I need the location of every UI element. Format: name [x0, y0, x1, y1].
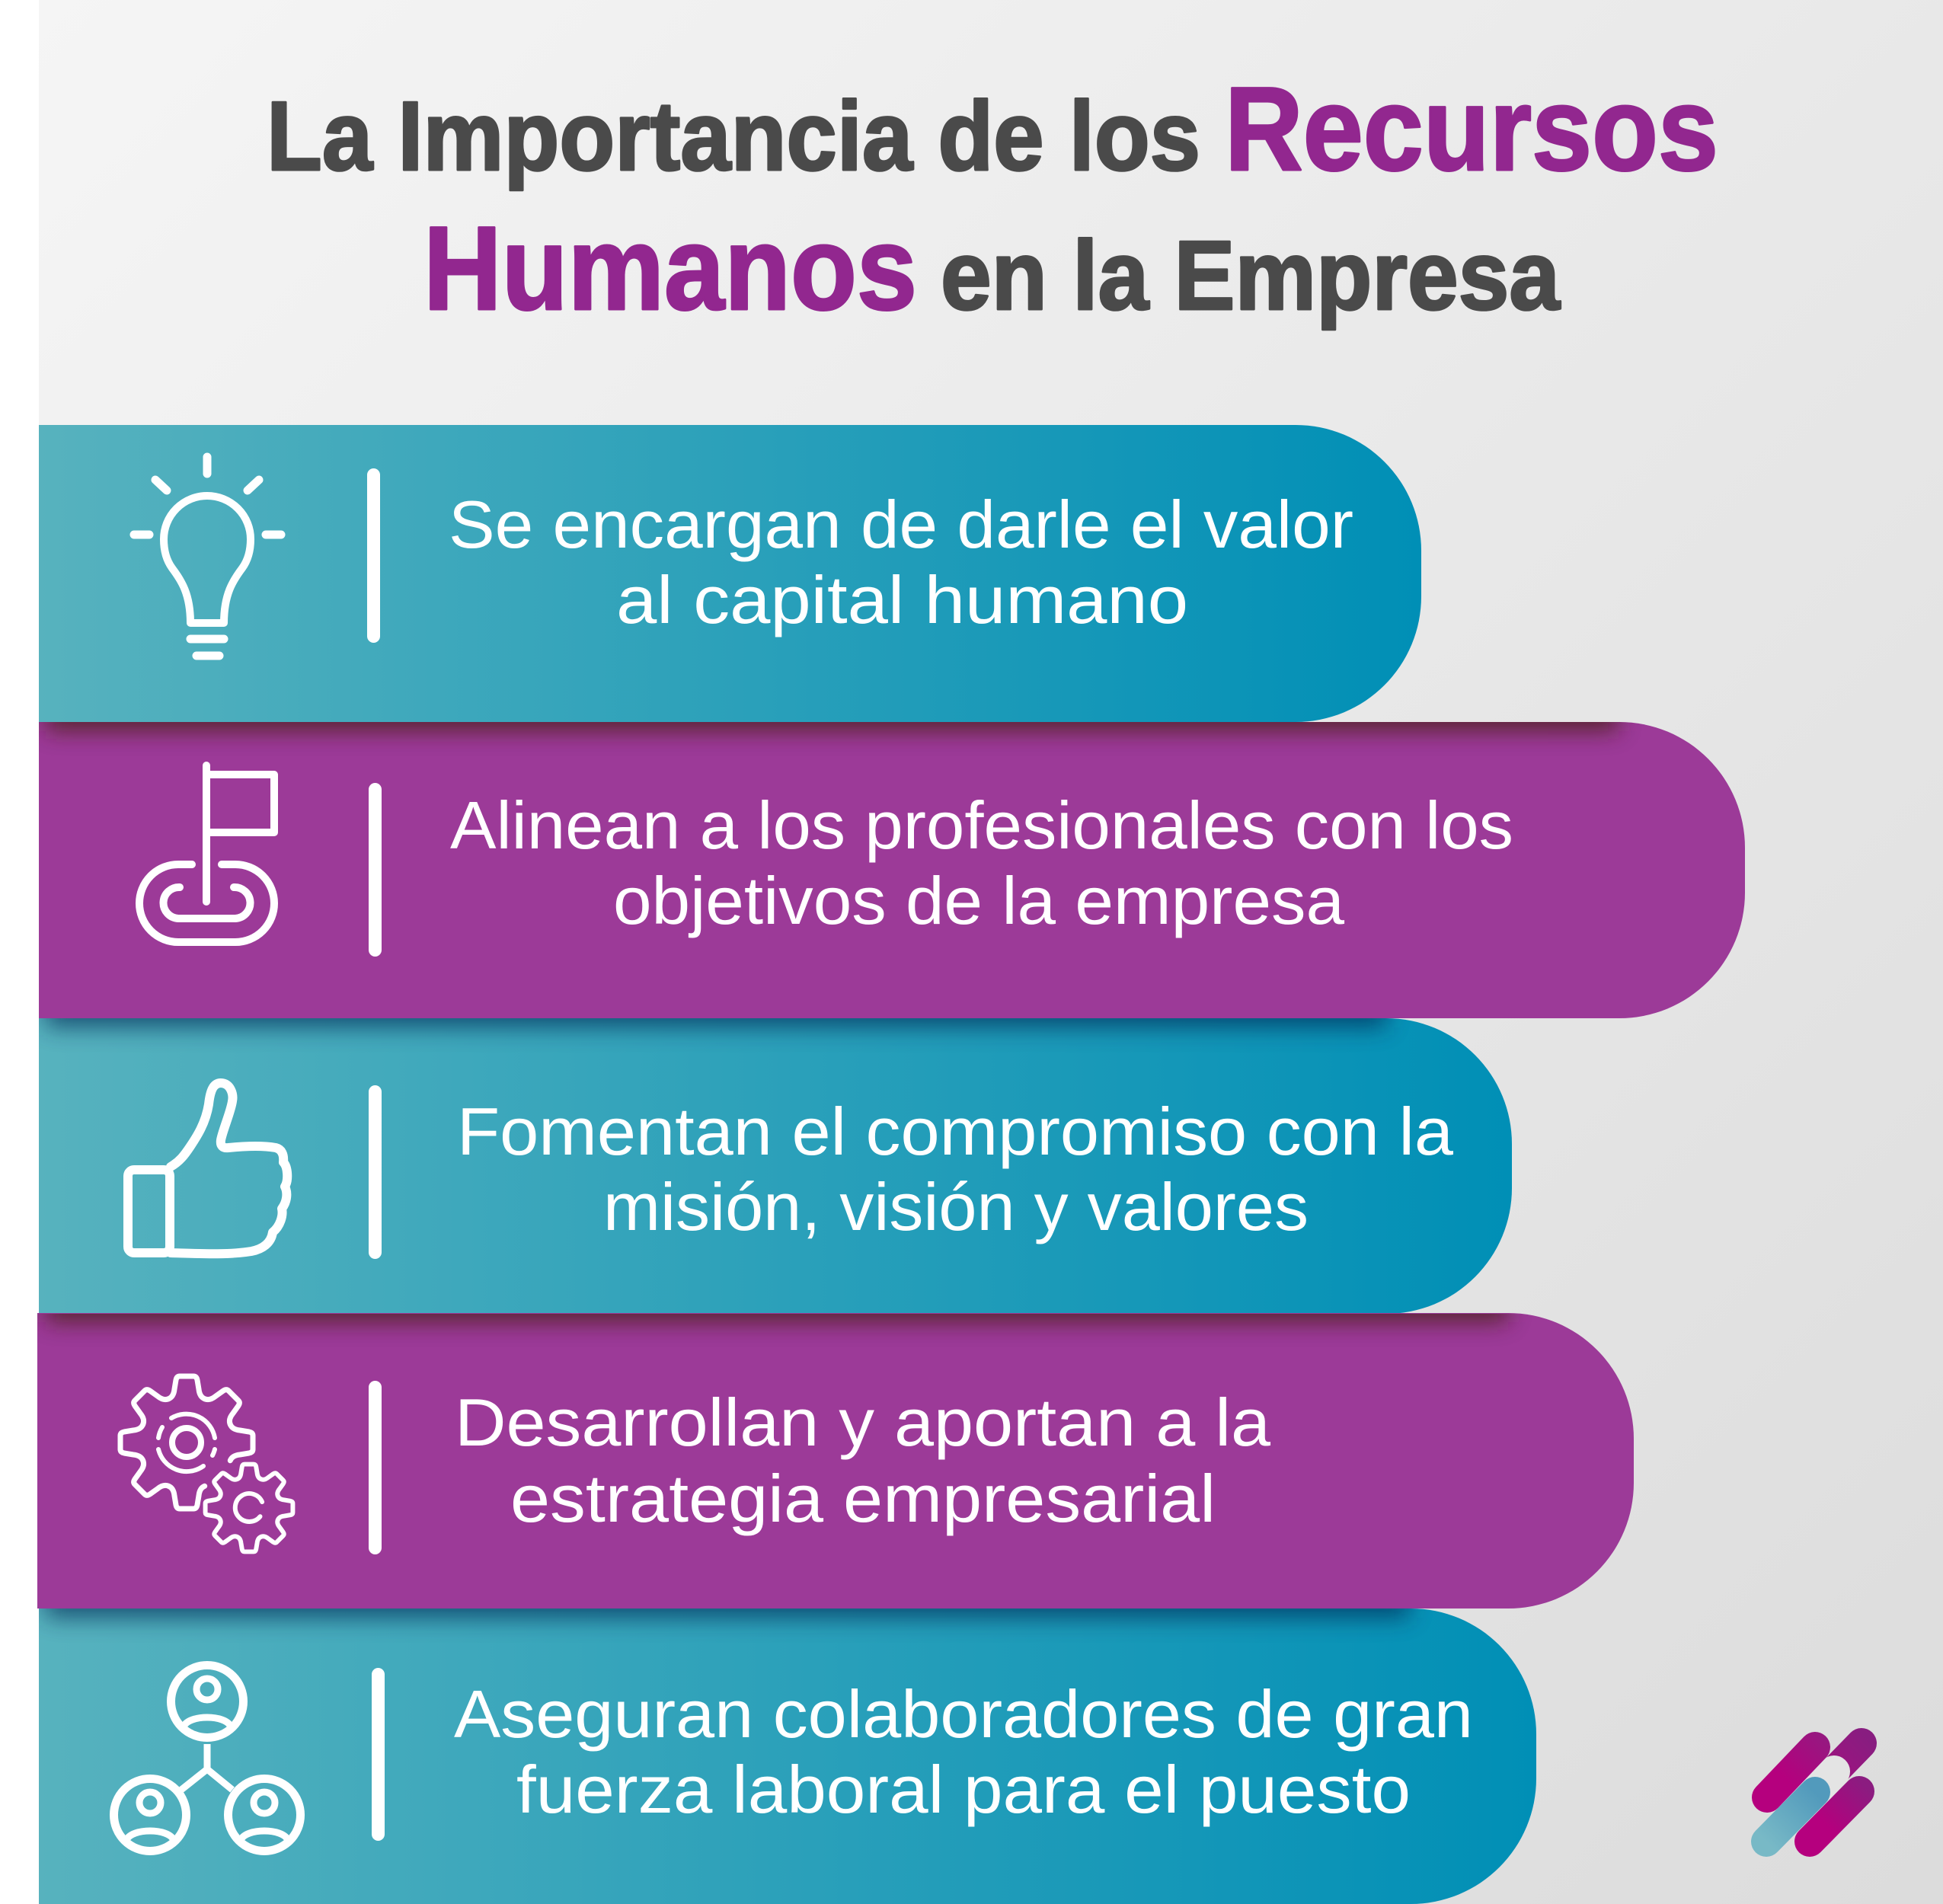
- divider: [369, 1381, 382, 1554]
- text: Fomentan el compromiso con la: [457, 1094, 1453, 1169]
- text: [450, 787, 1513, 938]
- panel: colaboradores: [39, 1583, 1536, 1904]
- divider: [369, 783, 382, 957]
- band 4: [37, 1313, 1634, 1608]
- text: misión, visión y valores: [603, 1169, 1309, 1244]
- icon: thumbs up: [128, 1083, 287, 1254]
- icon: light bulb: [134, 457, 281, 656]
- band 3: [39, 1018, 1512, 1314]
- top shadow 5: [39, 1608, 1421, 1634]
- panel: alinean objetivos: [39, 697, 1745, 1018]
- panel: compromiso: [39, 993, 1512, 1314]
- divider: [372, 1668, 385, 1841]
- icon: flag on target: [139, 765, 274, 942]
- band 5: [39, 1608, 1536, 1904]
- title line 2: Humanos: [423, 203, 917, 335]
- text: fuerza laboral para el puesto: [516, 1752, 1411, 1827]
- divider: [369, 1085, 382, 1259]
- divider: [367, 468, 380, 643]
- text: Alinean a los profesionales con los: [450, 787, 1513, 863]
- title line 1: La Importancia de los: [267, 81, 1200, 191]
- text: Desarrollan y aportan a la: [455, 1385, 1270, 1460]
- title line 2: en la Empresa: [941, 221, 1561, 331]
- text: Se encargan de darle el valor: [449, 487, 1353, 562]
- logo: [1766, 1743, 1862, 1842]
- panel: valor capital humano: [39, 425, 1421, 722]
- band 2: [39, 722, 1745, 1018]
- icon: people network: [114, 1665, 300, 1851]
- icon: gears: [120, 1376, 292, 1551]
- text: [449, 487, 1353, 637]
- text: objetivos de la empresa: [613, 863, 1344, 938]
- top shadow 2: [39, 722, 1632, 746]
- text: [454, 1676, 1473, 1827]
- text: Aseguran colaboradores de gran: [454, 1676, 1473, 1752]
- band 1: [39, 425, 1421, 722]
- panel: estrategia: [37, 1288, 1634, 1608]
- text: al capital humano: [616, 562, 1188, 637]
- title line 1: Recursos: [1225, 63, 1718, 196]
- top shadow 3: [39, 1018, 1398, 1043]
- text: estrategia empresarial: [510, 1461, 1216, 1536]
- top shadow 4: [37, 1314, 1522, 1337]
- text: [455, 1385, 1270, 1536]
- title line 1: [267, 63, 1718, 196]
- title: [267, 63, 1718, 335]
- title line 2: [423, 203, 1561, 335]
- text: [457, 1094, 1453, 1244]
